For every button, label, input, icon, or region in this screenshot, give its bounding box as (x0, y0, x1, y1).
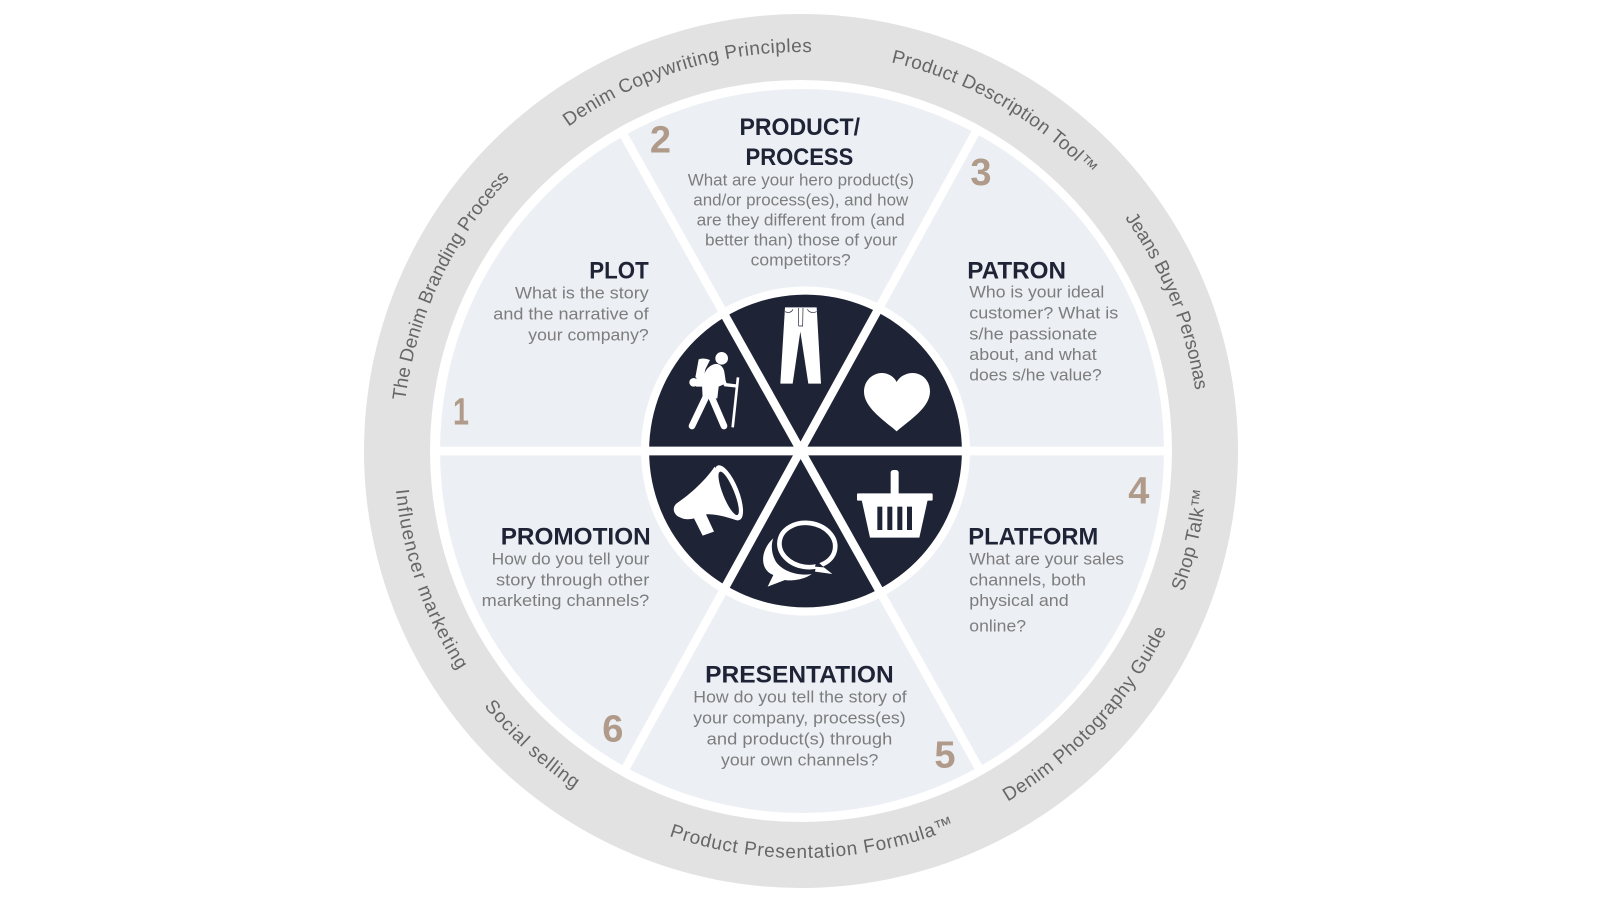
text: platform question: channels, both (969, 570, 1086, 589)
text: product question: What are your hero product(s) (688, 171, 914, 190)
text: promotion question: story through other (496, 570, 650, 589)
ring label: Influencer marketing: Influencer marketing (396, 490, 466, 670)
ring label: Product Description Tool: Product Description Tool™ (892, 50, 1098, 170)
heading: presentation: PRESENTATION (705, 662, 894, 689)
icon: speech bubbles (763, 519, 838, 587)
icon: jeans (780, 307, 821, 384)
number 4: 4 (1128, 470, 1149, 512)
text: presentation question (693, 688, 907, 770)
number 5: 5 (934, 734, 956, 776)
ring label: Social selling: Social selling (486, 700, 579, 790)
text: product question (688, 171, 914, 270)
text: platform question: What are your sales (969, 549, 1124, 568)
ring labels (392, 38, 1205, 858)
panel: 5 presentation (693, 662, 956, 776)
text: platform question: physical and (969, 591, 1069, 610)
heading: promotion: PROMOTION (501, 523, 651, 550)
number 2: 2 (650, 120, 671, 162)
panel: 2 product/process (650, 114, 914, 270)
text: promotion question: How do you tell your (492, 549, 650, 568)
ring label: Denim Copywriting Principles: Denim Copywriting Principles (562, 38, 812, 126)
text: plot question: your company? (528, 325, 649, 344)
text: promotion question (482, 549, 650, 610)
hub icons (674, 307, 933, 587)
text: product question: and/or process(es), and how (693, 191, 909, 210)
icon: hiker (689, 352, 738, 427)
panel: 4 platform (968, 470, 1149, 636)
number 1: 1 (453, 391, 469, 433)
heading: platform: PLATFORM (968, 523, 1098, 550)
panel: 1 plot (453, 257, 649, 433)
icon: megaphone (674, 462, 749, 536)
text: product question: competitors? (751, 251, 851, 270)
inner wheel: six segments (430, 80, 1172, 822)
ring label: Jeans Buyer Personas: Jeans Buyer Personas (1126, 214, 1205, 390)
text: patron question: customer? What is (969, 303, 1118, 322)
segment dividers (434, 130, 1168, 771)
text: presentation question: and product(s) through (707, 730, 892, 749)
ring label: The Denim Branding Process: The Denim Branding Process (392, 173, 508, 399)
number 3: 3 (970, 152, 992, 194)
outer ring: tools (364, 14, 1238, 888)
text: presentation question: How do you tell the story of (693, 688, 907, 707)
heading: product/process (740, 114, 860, 171)
text: patron question: Who is your ideal (969, 282, 1104, 301)
text: plot question (493, 283, 649, 344)
heading: product/process: PRODUCT/ (740, 114, 860, 141)
text: presentation question: your company, process(es) (693, 709, 906, 728)
ring label: Product Presentation Formula: Product Presentation Formula™ (670, 816, 951, 858)
text: promotion question: marketing channels? (482, 591, 649, 610)
text: presentation question: your own channels? (721, 751, 878, 770)
hub: dark centre circle (641, 286, 970, 616)
text: platform question: online? (969, 617, 1026, 636)
panel: 6 promotion (482, 523, 651, 751)
text: product question: are they different from (and (697, 211, 905, 230)
text: plot question: and the narrative of (493, 304, 649, 323)
heading: product/process: PROCESS (746, 144, 853, 171)
ring label: Shop Talk: Shop Talk™ (1172, 490, 1204, 590)
text: patron question: does s/he value? (969, 366, 1102, 385)
text: platform question (969, 549, 1124, 636)
heading: plot: PLOT (589, 257, 649, 284)
icon: heart (864, 373, 930, 431)
text: product question: better than) those of your (705, 231, 898, 250)
icon: shopping basket (857, 470, 933, 538)
text: patron question (969, 282, 1118, 385)
text: patron question: s/he passionate (969, 324, 1097, 343)
panel: 3 patron (967, 152, 1118, 385)
heading: patron: PATRON (967, 257, 1066, 284)
text: plot question: What is the story (515, 283, 649, 302)
text: patron question: about, and what (969, 345, 1097, 364)
ring label: Denim Photography Guide: Denim Photography Guide (1002, 628, 1165, 801)
number 6: 6 (602, 709, 623, 751)
